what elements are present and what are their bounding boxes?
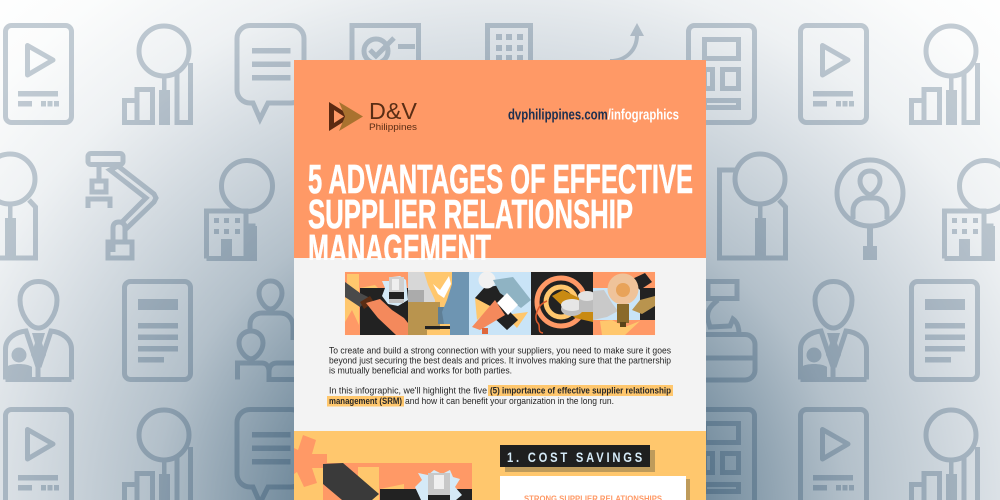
website url: dvphilippines.com/infographics <box>508 108 679 124</box>
intro text: beyond just securing the best deals and prices. It involves making sure that the partnership <box>329 356 671 366</box>
panel: intro background <box>294 258 706 431</box>
title <box>308 164 692 260</box>
highlight: key phrase <box>327 385 673 406</box>
strip panel: handshake and jar <box>345 272 408 335</box>
intro text: is mutually beneficial and works for both parties. <box>329 366 512 376</box>
logo: D&V Philippines <box>329 98 418 132</box>
card: strong supplier relationships <box>500 476 690 500</box>
logo: D&V Philippines: Philippines <box>369 122 418 132</box>
strip panel: partnership people <box>408 272 469 335</box>
intro text: In this infographic, we'll highlight the five <box>329 386 487 396</box>
illustration strip <box>344 272 656 336</box>
strip panel: target and coins <box>531 272 596 335</box>
panel: orange header <box>294 60 706 259</box>
heading: 1. cost savings: 1. COST SAVINGS <box>507 450 642 465</box>
intro text <box>327 346 673 406</box>
strip panel: megaphone <box>469 272 531 335</box>
heading: 1. cost savings <box>500 445 655 472</box>
title: 5 ADVANTAGES OF EFFECTIVE <box>308 156 693 202</box>
logo: D&V Philippines: D&V <box>369 98 418 124</box>
panel: infographic poster <box>294 60 706 500</box>
panel: cost savings section <box>294 431 706 500</box>
intro text: management (SRM) <box>329 396 402 406</box>
title: MANAGEMENT <box>308 226 491 272</box>
intro text: and how it can benefit your organization in the long run. <box>405 396 614 406</box>
decorative asterisk <box>294 435 327 487</box>
strip panel: light bulb <box>593 272 655 335</box>
illustration: handshake and jar <box>294 435 472 500</box>
title: SUPPLIER RELATIONSHIP <box>308 191 633 237</box>
intro text: To create and build a strong connection with your suppliers, you need to make sure it goes <box>329 346 671 356</box>
intro text: (5) importance of effective supplier relationship <box>490 386 671 396</box>
